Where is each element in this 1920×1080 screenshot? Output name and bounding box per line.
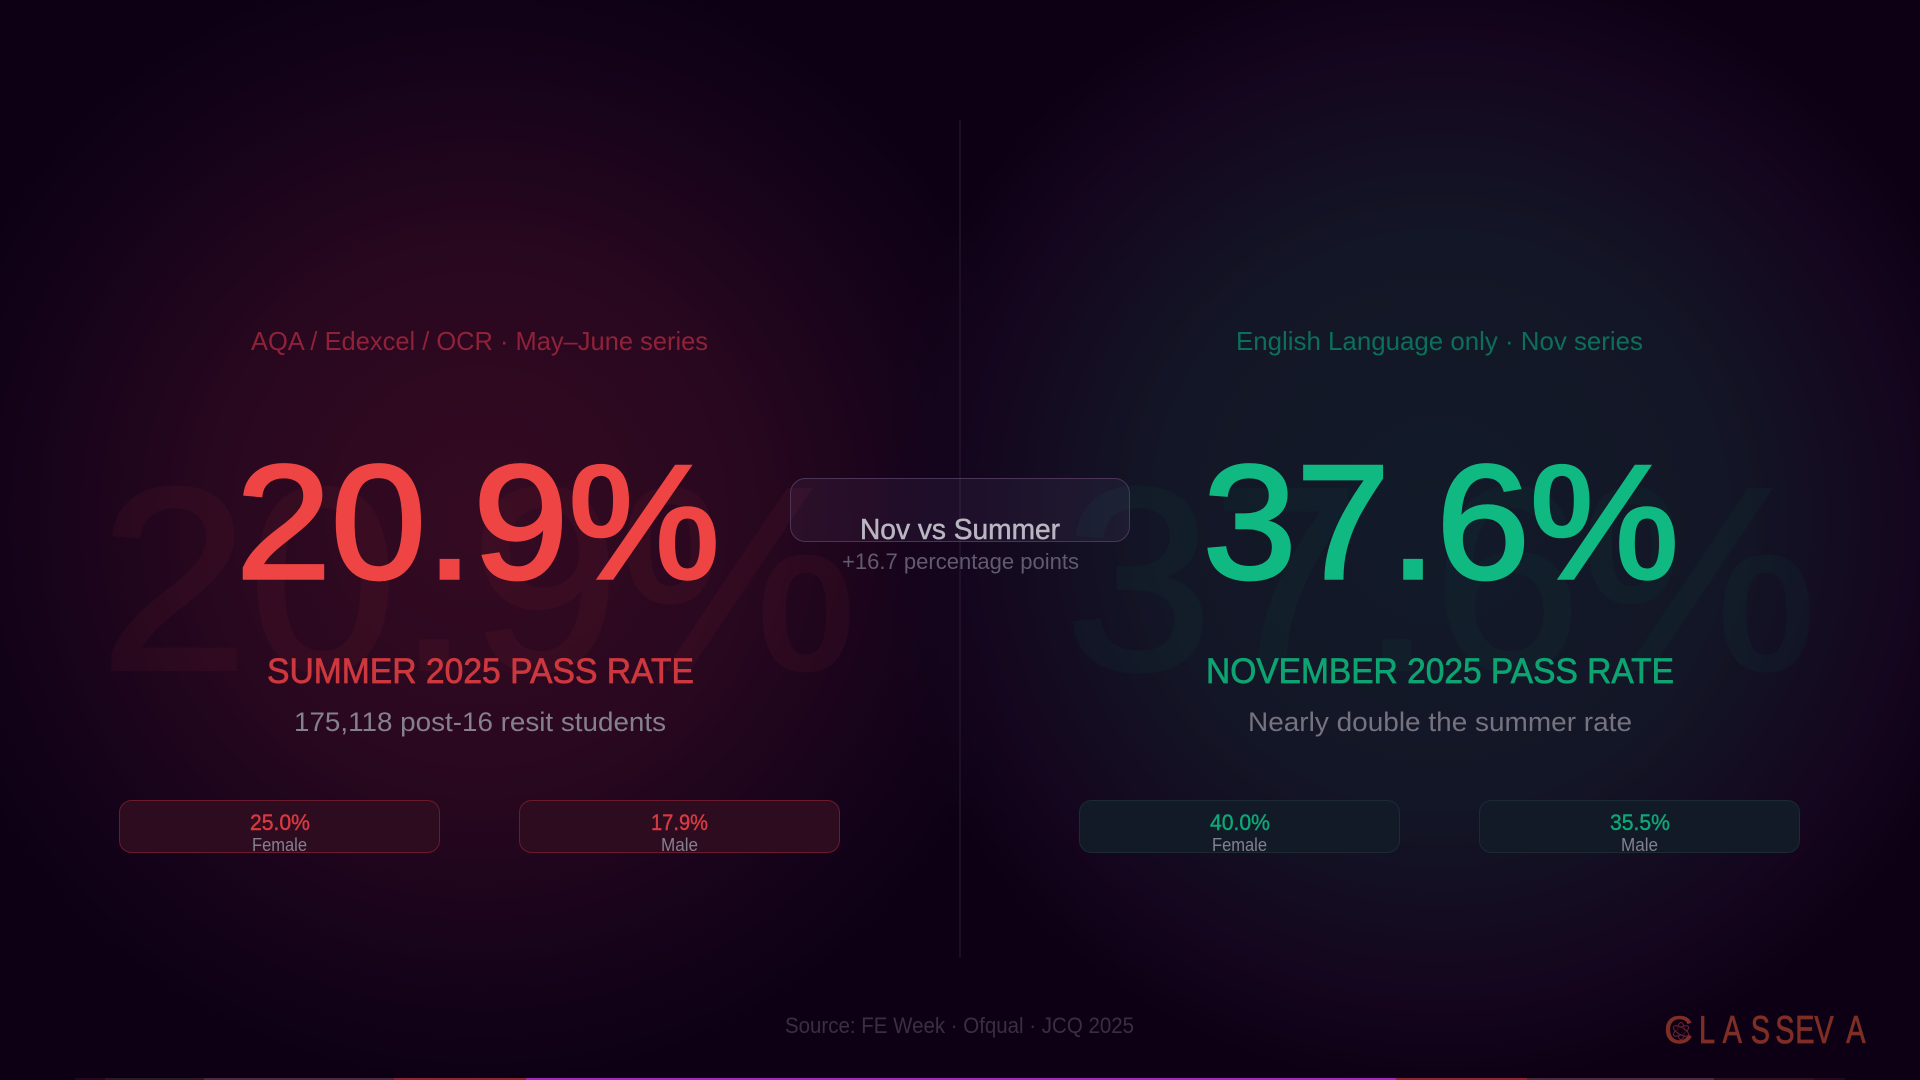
icon: flower in the C bbox=[1672, 1022, 1690, 1040]
november female pill: Female bbox=[1212, 835, 1267, 855]
bottom accent bar bbox=[75, 1078, 1845, 1080]
november ghost number: 37.6% bbox=[1065, 435, 1817, 725]
logo: classeva: LASSEVA bbox=[1699, 1009, 1866, 1052]
logo: classeva: C bbox=[1664, 1009, 1693, 1052]
summer big pass rate: 20.9% bbox=[236, 432, 720, 613]
panel: november 2025 bbox=[1065, 326, 1817, 855]
november female pill: 40.0% bbox=[1210, 810, 1270, 835]
summer female pill bbox=[120, 800, 440, 855]
callout: nov vs summer: Nov vs Summer bbox=[860, 514, 1060, 546]
panel: summer 2025 bbox=[100, 326, 857, 855]
summer female pill: Female bbox=[252, 835, 307, 855]
summer male pill: Male bbox=[661, 835, 698, 855]
november heading: NOVEMBER 2025 PASS RATE bbox=[1206, 652, 1674, 691]
summer series label: AQA / Edexcel / OCR · May–June series bbox=[251, 326, 708, 356]
summer ghost number: 20.9% bbox=[100, 435, 857, 725]
november big pass rate: 37.6% bbox=[1203, 432, 1679, 613]
summer male pill: 17.9% bbox=[651, 810, 708, 835]
summer male pill bbox=[520, 800, 840, 855]
november female pill bbox=[1080, 800, 1400, 855]
summer heading: SUMMER 2025 PASS RATE bbox=[267, 652, 694, 691]
november series label: English Language only · Nov series bbox=[1236, 326, 1643, 356]
summer subtext: 175,118 post-16 resit students bbox=[294, 707, 666, 737]
november male pill: Male bbox=[1621, 835, 1658, 855]
november male pill: 35.5% bbox=[1610, 810, 1670, 835]
source note: Source: FE Week · Ofqual · JCQ 2025 bbox=[785, 1013, 1134, 1038]
callout: nov vs summer: +16.7 percentage points bbox=[842, 549, 1079, 574]
november subtext: Nearly double the summer rate bbox=[1248, 707, 1632, 737]
callout: nov vs summer bbox=[790, 478, 1130, 574]
summer female pill: 25.0% bbox=[250, 810, 310, 835]
november male pill bbox=[1480, 800, 1800, 855]
